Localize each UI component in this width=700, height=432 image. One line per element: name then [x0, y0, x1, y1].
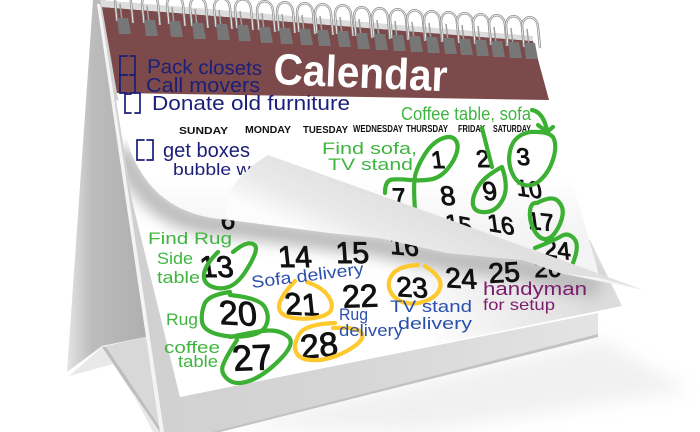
checklist text: Donate old furniture	[152, 93, 350, 115]
top page dates: 10	[514, 174, 543, 204]
second calendar page	[116, 100, 622, 397]
shadow under the curled sheet	[120, 150, 600, 286]
top page dates: 2	[474, 146, 492, 173]
top page dates: 3	[515, 144, 531, 171]
title: Calendar	[273, 45, 448, 101]
lower page notes: delivery: Rug	[339, 305, 368, 324]
weekday labels	[179, 124, 531, 137]
lower page notes: green	[148, 229, 232, 371]
lower page notes: delivery: delivery	[339, 321, 404, 340]
page curl	[225, 155, 643, 290]
top page dates: 16	[486, 210, 516, 241]
lower page notes: green: Find Rug	[148, 229, 232, 248]
top page dates: 9	[480, 176, 499, 206]
lower page notes: delivery: delivery	[398, 314, 473, 333]
weekday labels: SUNDAY	[179, 126, 228, 137]
lower page dates: 25	[487, 256, 521, 289]
lower page dates: 16	[388, 230, 420, 262]
lower page notes: green: table	[157, 268, 200, 287]
checklist text: get boxes	[163, 140, 250, 162]
top page notes: green	[322, 104, 532, 174]
lower page dates: 6	[221, 205, 235, 235]
top page dates: 15	[444, 210, 474, 241]
weekday labels: WEDNESDAY	[353, 124, 403, 135]
weekday labels: FRIDAY	[458, 124, 485, 135]
lower page dates: 13	[198, 251, 236, 284]
lower page dates: 20	[217, 294, 259, 334]
floor shadow	[225, 340, 690, 432]
green circles on lower page	[202, 243, 291, 383]
handyman note	[483, 279, 587, 314]
lower page notes: green: table	[178, 352, 218, 371]
top page notes: green: TV stand	[328, 155, 413, 174]
weekday labels: THURSDAY	[406, 124, 448, 135]
lower page notes: delivery	[250, 259, 473, 340]
weekday labels: SATURDAY	[493, 124, 531, 135]
lower page dates: 15	[335, 237, 370, 270]
lower page notes: green: Side	[157, 249, 193, 268]
top page notes: green: Find sofa,	[322, 139, 417, 158]
lower page dates: 14	[277, 241, 313, 274]
lower page notes: delivery: TV stand	[390, 297, 472, 316]
checklist text	[146, 56, 350, 179]
weekday labels: TUESDAY	[303, 125, 348, 136]
checklist text: Call movers	[146, 75, 260, 97]
top calendar page	[117, 93, 643, 290]
checklist boxes	[120, 56, 153, 160]
lower page notes: delivery: Sofa delivery	[250, 259, 365, 292]
top page dates: 1	[429, 147, 447, 174]
top strip above header	[100, 0, 533, 41]
calendar header band	[102, 7, 549, 100]
lower page dates: 28	[298, 325, 340, 367]
checklist text: bubble wr	[173, 160, 257, 179]
lower page dates: 21	[283, 286, 321, 323]
lower page notes: green: coffee	[164, 338, 220, 357]
top page dates: 7	[391, 184, 407, 211]
lower page dates: 27	[230, 337, 275, 379]
lower page dates: 24	[444, 262, 478, 295]
calendar base	[97, 4, 598, 432]
spiral binding rings	[115, 0, 540, 59]
top page dates: 17	[526, 208, 556, 237]
yellow delivery circles	[279, 265, 441, 360]
weekday labels: MONDAY	[245, 125, 291, 136]
stand foot	[69, 336, 180, 432]
handyman note: for setup	[483, 297, 555, 314]
handyman note: handyman	[483, 279, 587, 299]
green circles and arrows on top page	[385, 110, 577, 263]
top page dates	[391, 144, 572, 266]
top page dates: 24	[542, 235, 572, 266]
top page dates: 8	[438, 180, 457, 211]
checklist text: Pack closets	[147, 56, 262, 80]
lower page notes: green: Rug	[166, 310, 198, 329]
calendar back stand	[67, 0, 150, 372]
top page notes: green: Coffee table, sofa	[401, 104, 532, 124]
lower page dates: 23	[395, 271, 429, 304]
lower page dates: 22	[341, 277, 379, 315]
lower page dates	[198, 205, 561, 379]
lower page dates: 26	[535, 256, 561, 283]
